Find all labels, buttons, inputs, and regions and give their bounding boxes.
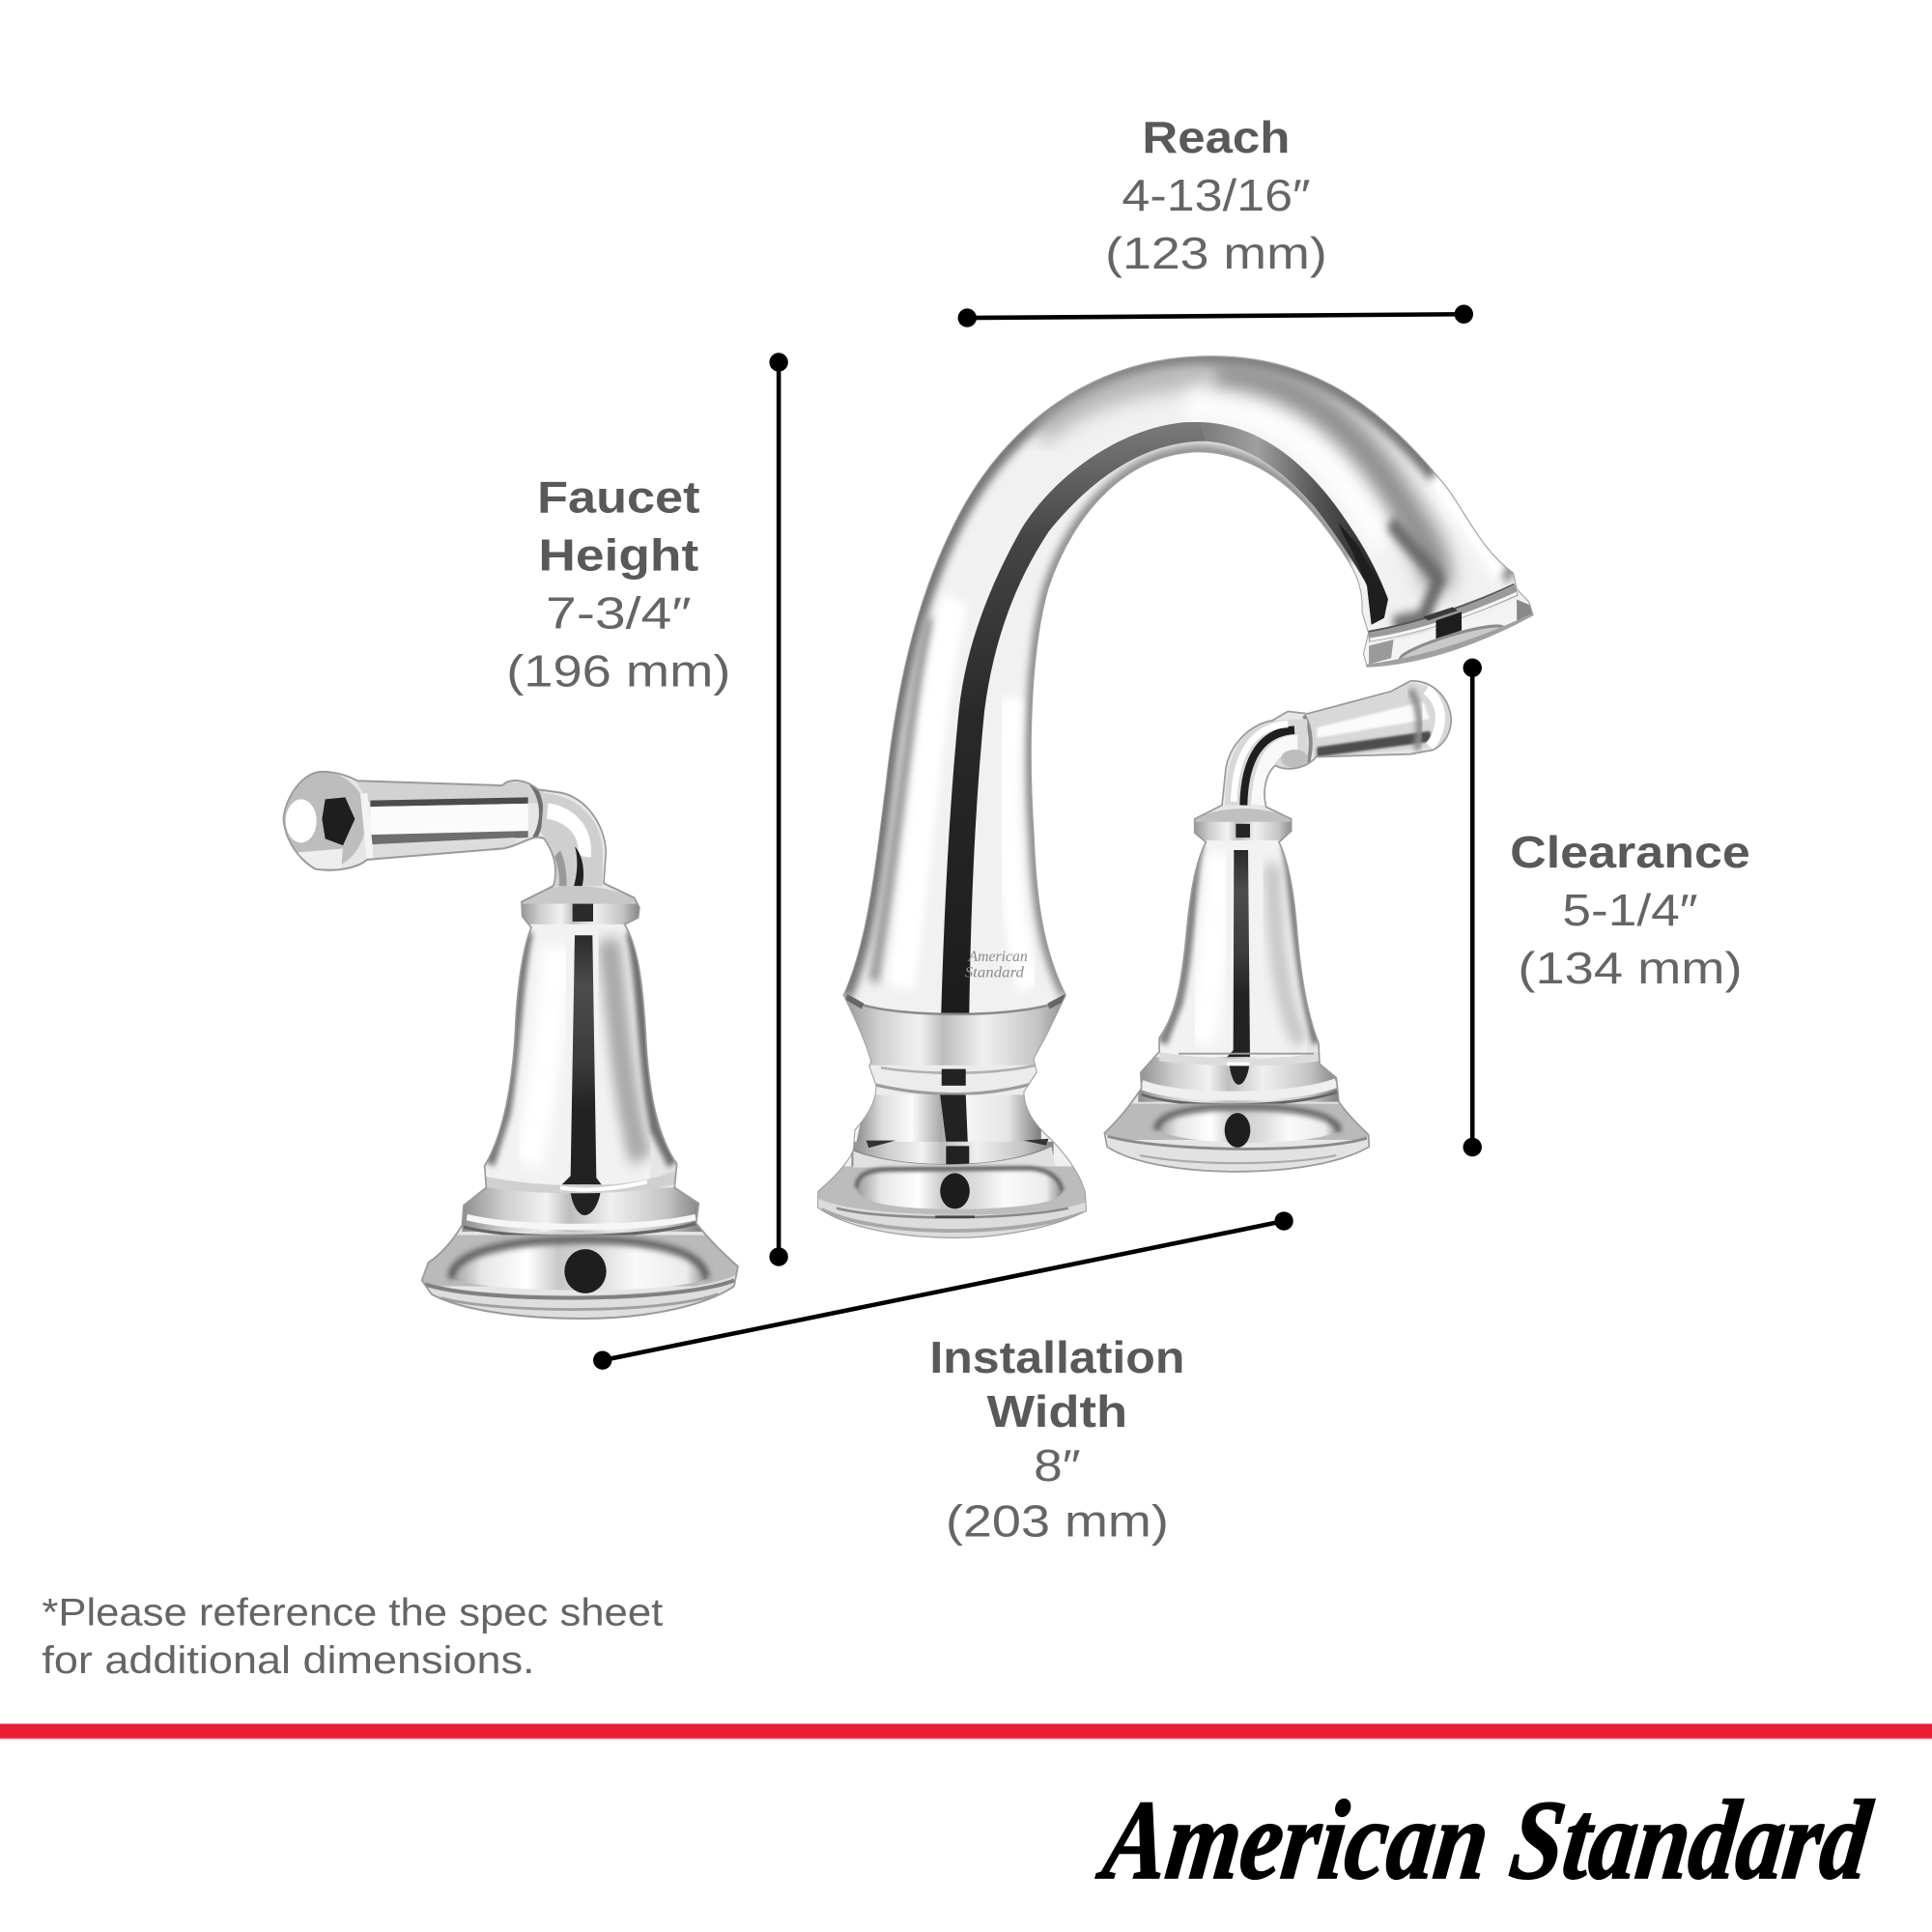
knob <box>283 772 367 869</box>
dome <box>1101 1103 1372 1140</box>
bell <box>1156 840 1307 1059</box>
rim <box>1105 1135 1368 1140</box>
label: faucet height: 7-3/4″ <box>546 588 692 639</box>
red divider bar <box>0 1723 1932 1739</box>
label: installation width <box>929 1332 1184 1547</box>
dimension line: faucet height <box>769 353 788 1266</box>
label: clearance: Clearance <box>1510 827 1750 877</box>
collar band <box>844 995 1062 1065</box>
embossed brand mark on spout: Standard <box>965 964 1024 980</box>
bell foot rings <box>462 1187 702 1232</box>
rim <box>425 1275 736 1287</box>
footnote <box>42 1591 663 1682</box>
label: faucet height: Faucet <box>537 472 699 523</box>
label: installation width: 8″ <box>1034 1440 1081 1491</box>
right handle <box>1103 680 1453 1173</box>
label: reach: (123 mm) <box>1105 228 1327 278</box>
elbow <box>1225 719 1307 806</box>
footnote: *Please reference the spec sheet <box>42 1591 663 1634</box>
lever shading <box>357 781 545 804</box>
label: faucet height: (196 mm) <box>506 645 730 696</box>
elbow <box>541 793 603 886</box>
dimension line: clearance <box>1463 659 1482 1156</box>
label: clearance: 5-1/4″ <box>1562 885 1698 935</box>
embossed brand mark on spout: American <box>968 949 1028 965</box>
label: faucet height <box>506 472 730 696</box>
collar <box>522 904 639 924</box>
neck <box>856 1094 1041 1143</box>
spout head <box>1391 522 1439 624</box>
label: reach: Reach <box>1142 112 1290 162</box>
collar <box>1196 821 1291 840</box>
embossed brand mark on spout <box>965 949 1028 980</box>
label: clearance <box>1510 827 1750 993</box>
dome <box>818 1166 1086 1215</box>
dimension line: reach <box>958 305 1473 327</box>
base rim <box>818 1199 1087 1240</box>
main spout <box>817 355 1534 1238</box>
label: reach: 4-13/16″ <box>1122 170 1311 220</box>
faucet product illustration <box>261 328 1580 1352</box>
arc reflection <box>1202 422 1387 615</box>
label: faucet height: Height <box>538 530 698 581</box>
left handle <box>282 771 739 1320</box>
label: reach <box>1105 112 1327 278</box>
label: installation width: (203 mm) <box>946 1496 1169 1547</box>
label: installation width: Installation <box>929 1332 1184 1382</box>
label: clearance: (134 mm) <box>1518 943 1743 993</box>
label: installation width: Width <box>987 1386 1127 1436</box>
bell <box>480 924 650 1187</box>
black reflection stripe <box>941 422 1207 1014</box>
footnote: for additional dimensions. <box>42 1639 535 1682</box>
waist ring <box>869 1065 1036 1074</box>
bell foot rings <box>1138 1057 1340 1102</box>
dome <box>422 1235 741 1287</box>
lever shading <box>1307 683 1451 760</box>
dimension line: installation width <box>593 1211 1293 1370</box>
lower ring <box>851 1142 1054 1167</box>
